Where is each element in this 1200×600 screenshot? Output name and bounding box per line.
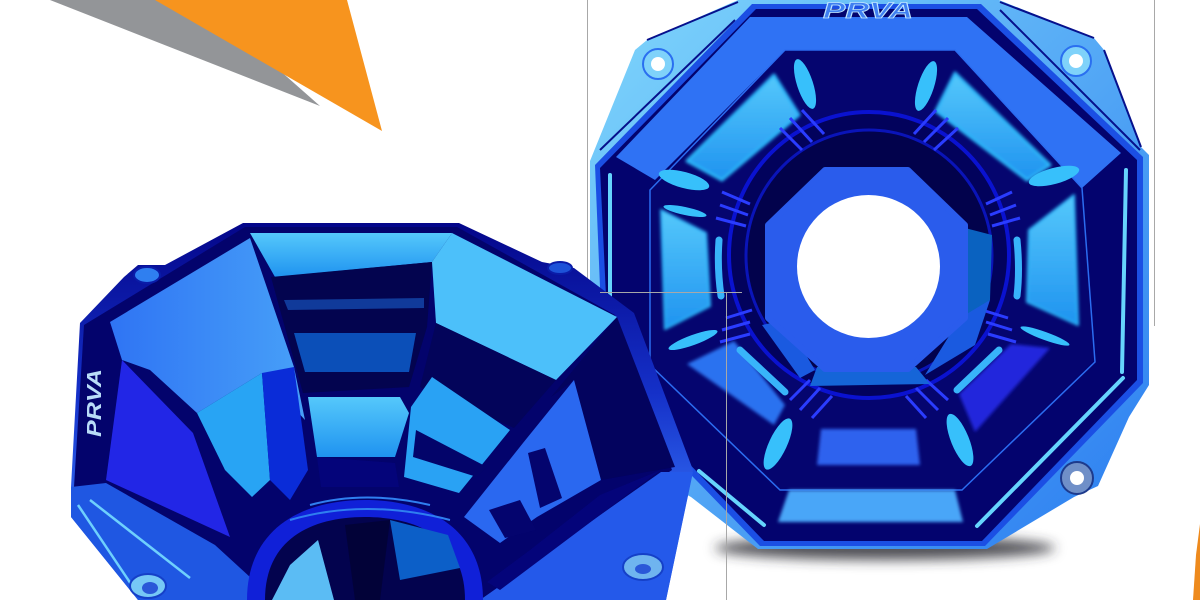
lower right light panel bbox=[404, 377, 510, 493]
throat outer ring bbox=[729, 112, 1009, 398]
white throat hole bbox=[797, 195, 940, 338]
bottom right rim bbox=[480, 472, 693, 600]
top center light panel bbox=[250, 233, 452, 277]
mounting hole bottom-right bbox=[623, 554, 663, 580]
inner left bright panel bbox=[197, 373, 270, 497]
dark stripe in light panel bbox=[413, 430, 487, 477]
blue band in column bbox=[294, 333, 416, 372]
throat dark center bbox=[345, 520, 390, 600]
center dark column bbox=[271, 262, 432, 393]
thin vertical crop line right bbox=[1154, 0, 1156, 326]
octagon body bbox=[595, 4, 1143, 546]
mounting ear top-right bbox=[548, 262, 572, 274]
collar reflection lower left bbox=[762, 320, 815, 378]
thin vertical crop line left bbox=[586, 0, 588, 292]
collar reflection right teal bbox=[965, 228, 992, 315]
bottom light lip panel bbox=[778, 490, 963, 522]
mounting flange with ears bbox=[590, 0, 1149, 549]
lower-right panel bbox=[959, 344, 1050, 432]
lower-left panel bbox=[687, 341, 785, 425]
upper left panel bbox=[110, 238, 305, 420]
dark stripe lower on right lower panel bbox=[489, 500, 536, 538]
mounting hole bottom-left bbox=[130, 574, 166, 598]
right dark reflection bbox=[420, 323, 556, 428]
thin horizontal crop line bbox=[600, 292, 742, 294]
far right navy panel bbox=[551, 317, 675, 480]
lower center dark band bbox=[317, 457, 399, 487]
left light panel bbox=[661, 210, 710, 329]
throat ribbed ring bbox=[247, 500, 483, 600]
collar reflection lower band bbox=[810, 367, 930, 386]
mounting hole bottom-right bbox=[1061, 462, 1093, 494]
reflected stripe in column bbox=[284, 298, 424, 310]
upper-left light panel bbox=[687, 75, 799, 180]
right lower blue panel bbox=[464, 380, 601, 543]
bottom left rim bbox=[71, 483, 275, 600]
bottom panel bbox=[817, 429, 920, 465]
mounting hole top-right bbox=[1061, 46, 1091, 76]
light rim lines bbox=[78, 500, 190, 590]
lower left violet panel bbox=[106, 360, 230, 537]
ear boundary lines bbox=[600, 2, 1141, 150]
mounting hole top-left bbox=[643, 49, 673, 79]
mounting ear top-left bbox=[134, 267, 160, 283]
thin vertical crop line center bbox=[726, 292, 728, 600]
lower center light panel bbox=[308, 397, 409, 457]
horn outer silhouette bbox=[71, 223, 693, 600]
throat ring highlight bands bbox=[290, 498, 450, 520]
angled-view blue horn bbox=[71, 223, 693, 600]
throat dark ring bbox=[746, 130, 992, 382]
inner outline stroke bbox=[650, 50, 1095, 490]
bright edge strips bbox=[610, 170, 1126, 526]
blue strip beside bright panel bbox=[262, 367, 308, 500]
decorative orange and gray wedge bbox=[50, 0, 382, 131]
dark inner octagon bbox=[650, 50, 1094, 490]
upper lighter band bbox=[616, 17, 1121, 188]
dark stripe upper on right lower panel bbox=[528, 448, 562, 508]
dark curved inner edge bbox=[487, 470, 661, 590]
throat reflection right bbox=[390, 520, 460, 580]
upper-right light panel bbox=[936, 73, 1050, 180]
throat reflection left bbox=[272, 540, 334, 600]
dark navy octagon bbox=[600, 9, 1137, 541]
PRVA logo on side rim: PRVA bbox=[84, 369, 106, 437]
throat dark interior bbox=[265, 517, 465, 600]
drop shadow below front-view horn bbox=[715, 536, 1055, 560]
light ring highlights bbox=[718, 240, 1018, 392]
right light panel bbox=[1027, 195, 1078, 325]
orange corner sliver bbox=[1193, 524, 1200, 600]
dark rim bbox=[74, 227, 672, 600]
front-view blue horn bbox=[590, 0, 1149, 549]
light panels group bbox=[661, 73, 1078, 522]
collar reflection lower right bbox=[925, 300, 990, 375]
blue inner octagon collar bbox=[768, 170, 965, 369]
upper right light panel bbox=[432, 233, 617, 380]
ribbed corner details bbox=[716, 110, 1020, 418]
corner highlight ovals bbox=[657, 57, 1081, 473]
